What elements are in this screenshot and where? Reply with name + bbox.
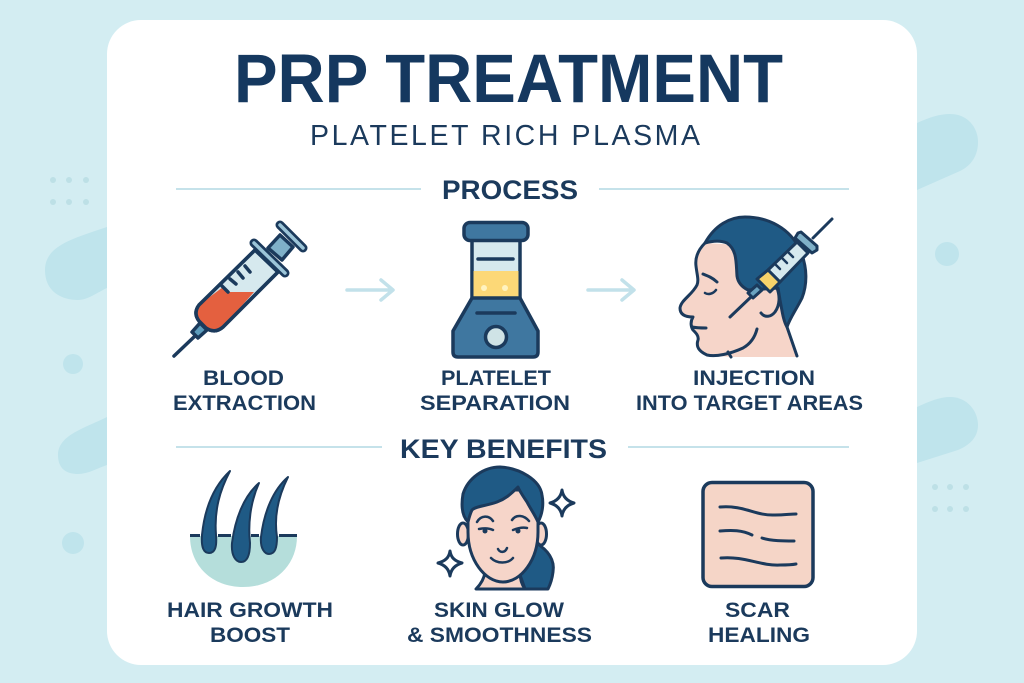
label: blood extraction bbox=[173, 367, 316, 415]
icon: scar healing skin patch bbox=[703, 482, 813, 586]
icon: centrifuge bbox=[453, 222, 538, 357]
section heading: process: PROCESS bbox=[442, 175, 578, 205]
label: skin glow and smoothness bbox=[407, 599, 592, 647]
icon: syringe with blood bbox=[174, 225, 303, 356]
label: scar healing: HEALING bbox=[708, 624, 810, 647]
label: skin glow and smoothness: SKIN GLOW bbox=[434, 599, 564, 622]
label: hair growth boost bbox=[167, 599, 333, 647]
label: blood extraction: EXTRACTION bbox=[173, 392, 316, 415]
section heading: key benefits: KEY BENEFITS bbox=[400, 434, 607, 464]
title: PRP TREATMENT bbox=[234, 40, 783, 117]
label: skin glow and smoothness: & SMOOTHNESS bbox=[407, 624, 592, 647]
label: scar healing: SCAR bbox=[725, 599, 790, 622]
subtitle: PLATELET RICH PLASMA bbox=[310, 120, 700, 152]
icon: hair follicles bbox=[190, 471, 297, 587]
label: hair growth boost: HAIR GROWTH bbox=[167, 599, 333, 622]
label: injection into target areas: INTO TARGET AREAS bbox=[636, 392, 863, 415]
label: scar healing bbox=[708, 599, 810, 647]
arrow: extraction to separation bbox=[347, 280, 393, 300]
label: platelet separation: SEPARATION bbox=[420, 392, 570, 415]
arrow: separation to injection bbox=[588, 280, 634, 300]
label: hair growth boost: BOOST bbox=[210, 624, 290, 647]
icon: woman with glowing skin bbox=[438, 467, 574, 589]
background decorations bbox=[45, 114, 978, 554]
label: injection into target areas bbox=[636, 367, 863, 415]
white card panel bbox=[107, 20, 917, 665]
label: platelet separation: PLATELET bbox=[441, 367, 551, 390]
label: injection into target areas: INJECTION bbox=[693, 367, 815, 390]
label: blood extraction: BLOOD bbox=[203, 367, 284, 390]
icon: head with injection bbox=[680, 217, 832, 357]
label: platelet separation bbox=[420, 367, 570, 415]
